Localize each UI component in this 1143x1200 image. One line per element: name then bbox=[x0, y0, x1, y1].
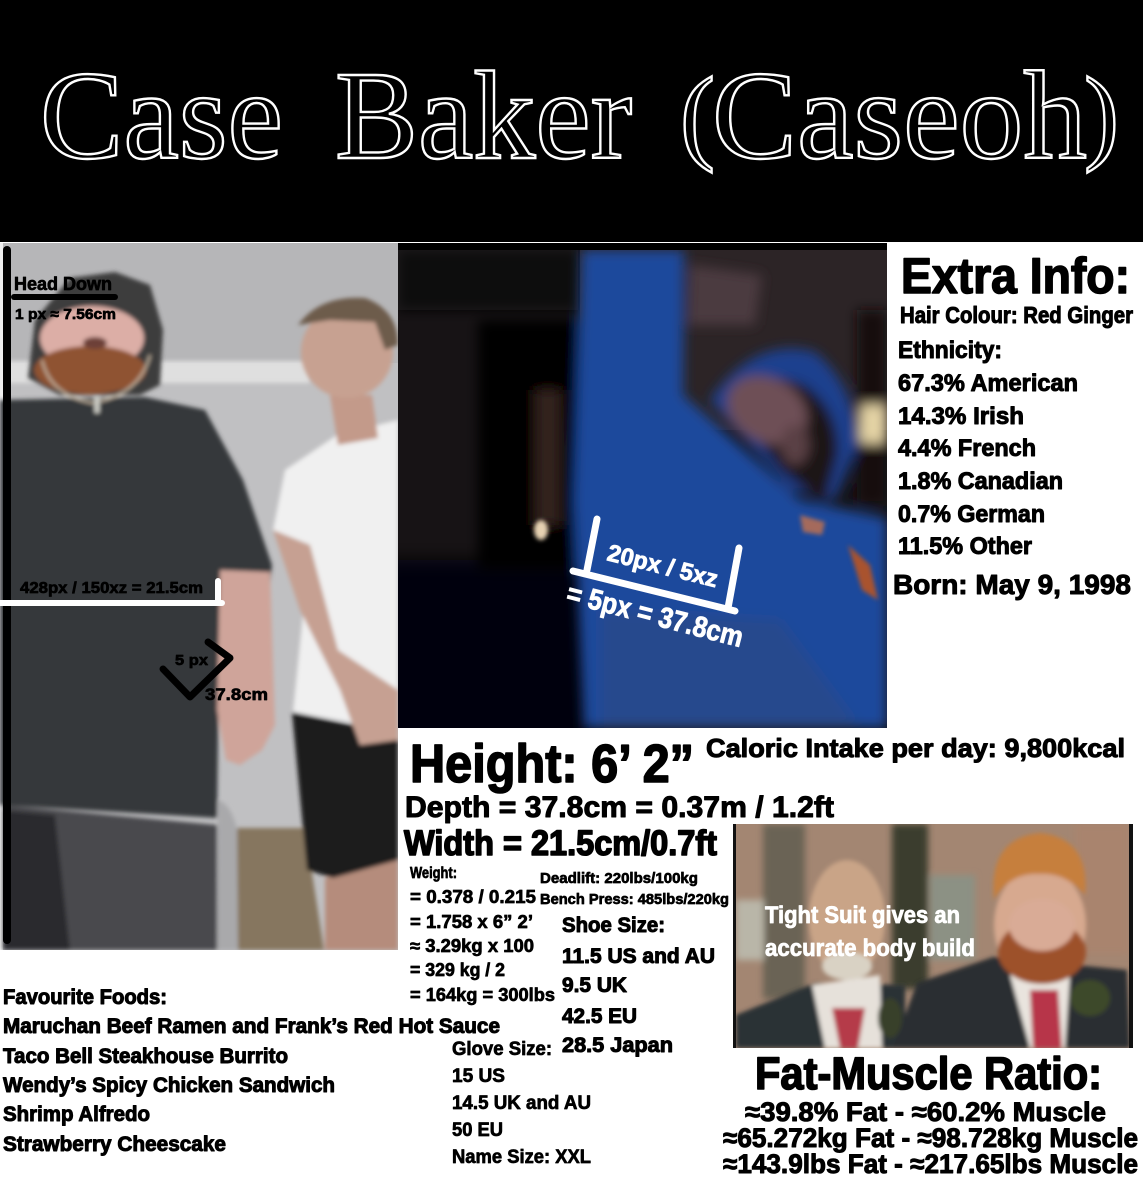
panel: favourite foods: Maruchan Beef Ramen and Frank’s Red Hot Sauce bbox=[3, 1015, 500, 1038]
panel: blue hoodie photo with measurement bbox=[380, 243, 887, 750]
shoe size list: 42.5 EU bbox=[562, 1005, 637, 1028]
ethnicity list: 67.3% American bbox=[898, 370, 1078, 397]
shoe size list: Shoe Size: bbox=[562, 914, 665, 937]
panel: favourite foods: Strawberry Cheescake bbox=[3, 1133, 226, 1156]
glove and name size list: 14.5 UK and AU bbox=[452, 1093, 591, 1114]
label: 5 px: 5 px bbox=[175, 652, 209, 669]
panel: favourite foods: Wendy’s Spicy Chicken Sandwich bbox=[3, 1074, 335, 1097]
label: 5px = 37.8cm: = 5px = 37.8cm bbox=[563, 578, 746, 654]
shoe size list: 11.5 US and AU bbox=[562, 945, 715, 968]
glove and name size list: Name Size: XXL bbox=[452, 1147, 591, 1168]
panel: front photo with measurements bbox=[0, 243, 398, 950]
bracket: depth measure bbox=[573, 519, 739, 611]
glove and name size list: Glove Size: bbox=[452, 1039, 552, 1060]
panel: favourite foods: Shrimp Alfredo bbox=[3, 1103, 150, 1126]
title: ) bbox=[1084, 56, 1119, 173]
label: width: 428px / 150xz = 21.5cm bbox=[20, 580, 203, 597]
width: Width = 21.5cm/0.7ft bbox=[404, 824, 717, 863]
label: head scale: 1 px ≈ 7.56cm bbox=[15, 306, 116, 323]
ethnicity list: 14.3% Irish bbox=[898, 403, 1024, 430]
ruler: vertical height line bbox=[3, 250, 11, 940]
lifts: Deadlift: 220lbs/100kg bbox=[540, 870, 698, 887]
photo caption: Tight Suit gives an bbox=[765, 902, 960, 929]
label: depth: 37.8cm bbox=[205, 685, 268, 704]
ethnicity list: Ethnicity: bbox=[898, 337, 1002, 364]
panel: body measurements bbox=[404, 733, 1125, 1168]
photo caption: accurate body build bbox=[765, 935, 975, 962]
ratio values: ≈143.9lbs Fat - ≈217.65lbs Muscle bbox=[723, 1149, 1138, 1179]
caloric intake: Caloric Intake per day: 9,800kcal bbox=[706, 733, 1125, 763]
weight calculation: = 0.378 / 0.215 bbox=[410, 887, 536, 907]
ethnicity list: 11.5% Other bbox=[898, 533, 1032, 560]
title: Baker bbox=[335, 47, 632, 186]
weight calculation bbox=[410, 865, 555, 1005]
heading: fat-muscle ratio: Fat-Muscle Ratio: bbox=[755, 1048, 1102, 1099]
panel: favourite foods bbox=[3, 986, 500, 1156]
depth: Depth = 37.8cm = 0.37m / 1.2ft bbox=[405, 791, 834, 824]
weight calculation: = 164kg = 300lbs bbox=[410, 985, 555, 1005]
shoe size list: 28.5 Japan bbox=[562, 1034, 673, 1057]
weight calculation: Weight: bbox=[410, 865, 457, 882]
glove and name size list bbox=[452, 1039, 591, 1168]
title banner bbox=[0, 0, 1143, 242]
title: ( bbox=[680, 56, 715, 173]
ruler: width line bbox=[0, 580, 222, 603]
title: Caseoh bbox=[712, 47, 1087, 186]
weight calculation: = 329 kg / 2 bbox=[410, 960, 505, 980]
ethnicity list bbox=[898, 337, 1078, 560]
glove and name size list: 15 US bbox=[452, 1066, 505, 1087]
heading: extra info: Extra Info: bbox=[901, 248, 1130, 304]
ruler: head height line bbox=[14, 274, 115, 297]
weight calculation: ≈ 3.29kg x 100 bbox=[410, 936, 534, 956]
ethnicity list: 1.8% Canadian bbox=[898, 468, 1063, 495]
ethnicity list: 4.4% French bbox=[898, 435, 1036, 462]
lifts bbox=[540, 870, 729, 908]
shoe size list: 9.5 UK bbox=[562, 974, 627, 997]
lifts: Bench Press: 485lbs/220kg bbox=[540, 891, 729, 908]
weight calculation: = 1.758 x 6” 2’ bbox=[410, 912, 533, 932]
panel: suit photo bbox=[733, 824, 1133, 1048]
ratio values: ≈39.8% Fat - ≈60.2% Muscle bbox=[745, 1097, 1106, 1127]
label: head down: Head Down bbox=[14, 274, 112, 294]
glove and name size list: 50 EU bbox=[452, 1120, 503, 1141]
ratio values bbox=[723, 1097, 1138, 1179]
panel: favourite foods: Favourite Foods: bbox=[3, 986, 167, 1009]
height: Height: 6’ 2” bbox=[410, 734, 694, 794]
panel: extra info bbox=[893, 248, 1133, 600]
ruler: depth chevron bbox=[163, 642, 230, 697]
label: 20px / 5xz: 20px / 5xz bbox=[605, 540, 721, 593]
ethnicity list: 0.7% German bbox=[898, 501, 1045, 528]
title bbox=[40, 47, 1119, 186]
panel: favourite foods: Taco Bell Steakhouse Burrito bbox=[3, 1045, 288, 1068]
ratio values: ≈65.272kg Fat - ≈98.728kg Muscle bbox=[723, 1123, 1138, 1153]
panel: fat-muscle ratio bbox=[723, 1048, 1138, 1179]
born date: Born: May 9, 1998 bbox=[893, 569, 1131, 600]
title: Case bbox=[40, 47, 283, 186]
shoe size list bbox=[562, 914, 715, 1057]
photo caption bbox=[765, 902, 975, 962]
